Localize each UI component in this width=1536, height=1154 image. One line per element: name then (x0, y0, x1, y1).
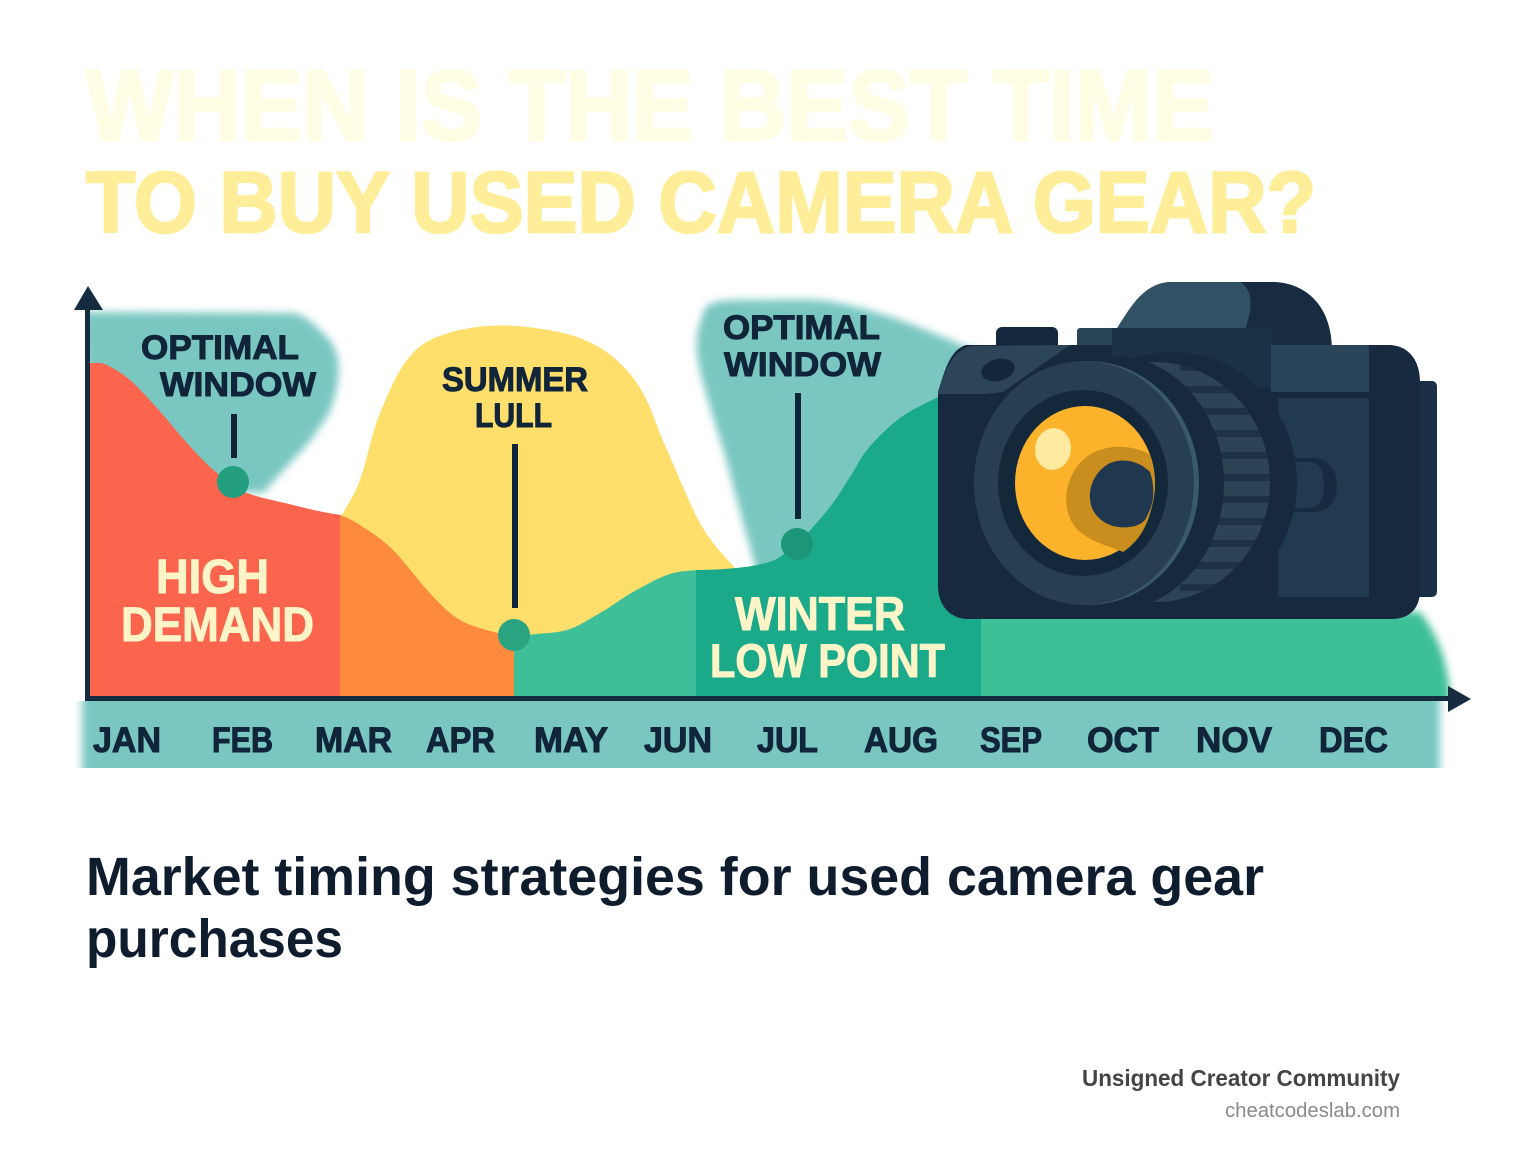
month labels: MAR (315, 721, 392, 760)
light green area (514, 570, 697, 698)
camera flash window (979, 355, 1017, 385)
camera top plate (938, 345, 1070, 394)
optimal window label, left (141, 329, 317, 404)
title (86, 50, 1316, 251)
summer lull label: LULL (475, 397, 552, 435)
optimal window background, left (80, 312, 339, 493)
month labels: APR (426, 721, 495, 760)
summer lull yellow area (342, 326, 735, 660)
optimal window background, right (697, 300, 985, 575)
high demand red area (88, 363, 341, 698)
marker: summer lull (498, 444, 530, 651)
camera body (938, 345, 1420, 619)
subtitle: Market timing strategies for used camera gear (86, 847, 1264, 907)
month labels: NOV (1196, 721, 1273, 760)
month labels: JUN (644, 721, 712, 760)
month axis band (76, 701, 1446, 768)
winter low point label: LOW POINT (710, 634, 945, 687)
month labels: AUG (864, 721, 938, 760)
title: TO BUY USED CAMERA GEAR? (86, 155, 1316, 251)
camera central block (1112, 328, 1272, 388)
month labels: OCT (1087, 721, 1159, 760)
icon: camera (938, 282, 1437, 619)
month labels: FEB (212, 721, 273, 760)
high demand label: DEMAND (121, 599, 314, 652)
month labels: JAN (93, 721, 161, 760)
lens highlight (1032, 426, 1074, 472)
optimal window label, right: WINDOW (724, 346, 882, 384)
title: WHEN IS THE BEST TIME (86, 50, 1214, 162)
lens pupil (1090, 460, 1153, 527)
lens outer ring (977, 361, 1199, 605)
subtitle: purchases (86, 909, 343, 969)
chart axes with arrows (74, 286, 1471, 712)
camera top buttons (996, 327, 1127, 358)
high demand label: HIGH (156, 551, 269, 604)
winter low point label: WINTER (735, 587, 905, 640)
footer credit: Unsigned Creator Community (1082, 1065, 1400, 1091)
optimal window label, right: OPTIMAL (723, 309, 880, 347)
right light green area (981, 606, 1456, 696)
marker: left optimal window (217, 414, 249, 498)
month labels: JUL (757, 721, 818, 760)
lens barrel (1112, 352, 1297, 602)
winter low point label (710, 587, 945, 687)
summer lull label: SUMMER (442, 361, 588, 399)
summer lull label (442, 361, 588, 435)
month labels: DEC (1319, 721, 1388, 760)
lens reflection (1066, 447, 1155, 552)
winter low point dark green area (696, 396, 981, 698)
high demand label (121, 551, 314, 652)
footer credit: cheatcodeslab.com (1225, 1100, 1400, 1122)
month labels: SEP (980, 721, 1042, 760)
optimal window label, right (723, 309, 882, 384)
footer credit (1082, 1065, 1400, 1122)
month labels (93, 721, 1388, 760)
camera viewfinder hump (1112, 282, 1332, 370)
subtitle (86, 847, 1264, 969)
orange transition area (340, 515, 514, 698)
marker: right optimal window (781, 393, 813, 560)
seasonal demand chart (80, 300, 1450, 705)
optimal window label, left: WINDOW (160, 366, 317, 404)
lens glass (1015, 406, 1155, 560)
camera side knob (1285, 458, 1337, 512)
month labels: MAY (534, 721, 608, 760)
camera right panels (1271, 345, 1369, 597)
optimal window label, left: OPTIMAL (141, 329, 299, 367)
camera right grip (1400, 381, 1437, 597)
lens inner ring (998, 390, 1168, 576)
